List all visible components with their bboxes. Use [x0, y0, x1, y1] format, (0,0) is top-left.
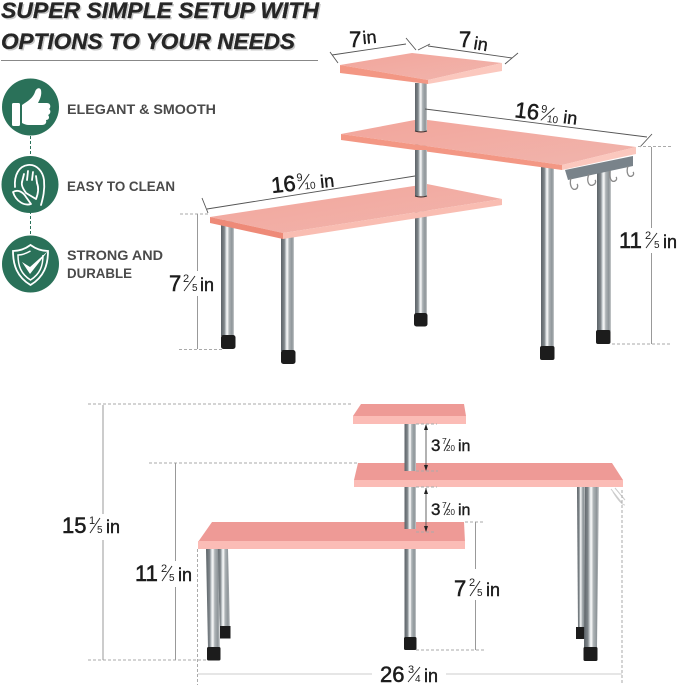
hook detail [611, 488, 625, 505]
title: OPTIONS TO YOUR NEEDS [1, 29, 295, 54]
label: strong and durable: DURABLE [67, 265, 132, 281]
dimension: middle shelf length 16 9/10 in: 9 [540, 103, 548, 116]
dimension: right height 11 2/5 in: 2 [645, 230, 651, 242]
title: OPTIONS TO YOUR NEEDS [2, 30, 297, 56]
dimension: overall width 26 3/4 in [198, 490, 622, 686]
dimension: middle shelf length 16 9/10 in: 16 [513, 97, 541, 125]
front left leg [206, 549, 220, 660]
dimension: top shelf width 7 in left [330, 27, 416, 63]
back left leg [217, 549, 230, 638]
dimension: upper gap 3 7/20 in: in [458, 438, 470, 455]
hook rack [565, 156, 634, 189]
dimension: overall width 26 3/4 in: 3 [408, 664, 414, 676]
title: SUPER SIMPLE SETUP WITH [2, 0, 322, 24]
dimension: left height 7 2/5 in: 5 [192, 283, 198, 294]
right back leg [596, 170, 611, 344]
dimension: bottom shelf height 7 2/5 in: 2 [469, 577, 475, 589]
dimension: bottom shelf length 16 9/10 in: in [319, 171, 335, 192]
dimension: middle height 11 2/5 in: 2 [161, 563, 167, 575]
dimension: overall height 15 1/5 in: 15 [62, 513, 86, 538]
icon: thumbs up [2, 78, 59, 136]
dimension: upper gap 3 7/20 in: 3 [431, 436, 440, 455]
title [1, 0, 322, 56]
top shelf front view [353, 404, 466, 424]
label: elegant and smooth: ELEGANT & SMOOTH [67, 101, 216, 117]
dimension: left height 7 2/5 in: 7 [169, 271, 181, 296]
dimension: middle shelf length 16 9/10 in: in [562, 107, 578, 129]
dimension: left height 7 2/5 in: in [200, 275, 214, 295]
dimension: left height 7 2/5 in [169, 214, 222, 350]
dimension: overall height 15 1/5 in: 1 [89, 515, 95, 527]
label: strong and durable [67, 247, 163, 281]
dimension: lower gap 3 7/20 in: in [458, 502, 470, 519]
dimension: bottom shelf height 7 2/5 in: 7 [454, 576, 466, 601]
dimension: middle shelf length 16 9/10 in [425, 97, 652, 147]
dimension: top shelf depth 7 in right: 7 [459, 27, 471, 52]
dimension: right height 11 2/5 in [612, 146, 677, 344]
left front leg [281, 236, 296, 364]
dimension: upper gap 3 7/20 in [416, 424, 470, 471]
dimension: bottom shelf height 7 2/5 in: in [486, 580, 500, 600]
centre pole [404, 424, 416, 650]
dimension: middle height 11 2/5 in: in [178, 565, 192, 585]
dimension: top shelf width 7 in left: in [362, 27, 377, 48]
label: easy to clean: EASY TO CLEAN [67, 178, 175, 194]
dimension: top shelf depth 7 in right: in [472, 33, 489, 55]
dimension: upper gap 3 7/20 in: 7 [442, 436, 447, 446]
dimension: top shelf width 7 in left: 7 [349, 27, 361, 52]
top shelf [340, 53, 502, 84]
back right leg [576, 487, 585, 639]
dimension: right height 11 2/5 in: 11 [619, 228, 642, 253]
icon: hand wiping [2, 156, 58, 213]
dimension: bottom shelf length 16 9/10 in: 10 [304, 180, 317, 193]
middle shelf front view [354, 440, 623, 487]
middle shelf [341, 84, 636, 170]
central pole [414, 83, 428, 326]
bottom shelf [210, 150, 502, 239]
dimension: upper gap 3 7/20 in: 20 [446, 444, 455, 453]
label: strong and durable: STRONG AND [67, 247, 163, 263]
dimension: middle height 11 2/5 in: 11 [135, 561, 158, 586]
feature list [2, 78, 216, 292]
shelf unit: front view [198, 404, 625, 661]
dimension: middle shelf length 16 9/10 in: 10 [546, 114, 559, 126]
front right leg [584, 487, 599, 661]
dimension: middle height 11 2/5 in [135, 463, 358, 660]
dimension: right height 11 2/5 in: 5 [654, 240, 660, 251]
dimension: overall height 15 1/5 in: 5 [97, 525, 103, 536]
dimension: lower gap 3 7/20 in: 7 [442, 500, 447, 510]
dimension: bottom shelf length 16 9/10 in [202, 167, 415, 213]
dimension: bottom shelf length 16 9/10 in: 9 [296, 172, 303, 184]
dimension: right height 11 2/5 in: in [663, 232, 677, 252]
dimension: bottom shelf height 7 2/5 in [416, 522, 500, 650]
dimension: overall height 15 1/5 in [62, 404, 353, 660]
dimension: top shelf depth 7 in right [418, 27, 518, 64]
dimension: bottom shelf length 16 9/10 in: 16 [270, 171, 297, 198]
dimension: lower gap 3 7/20 in: 3 [431, 500, 440, 519]
dimension: overall width 26 3/4 in: in [424, 666, 438, 686]
icon: shield with check [2, 236, 59, 292]
dimension: overall width 26 3/4 in: 4 [415, 674, 421, 685]
dimension: lower gap 3 7/20 in [416, 487, 470, 532]
left back leg [221, 220, 236, 349]
dimension: left height 7 2/5 in: 2 [183, 273, 189, 285]
right front leg [540, 165, 554, 360]
dimension: lower gap 3 7/20 in: 20 [446, 508, 455, 517]
bottom shelf front view [198, 490, 465, 549]
dimension: bottom shelf height 7 2/5 in: 5 [477, 588, 483, 599]
dimension: middle height 11 2/5 in: 5 [169, 573, 175, 584]
shelf unit: angled view [210, 53, 636, 364]
dimension: overall height 15 1/5 in: in [106, 517, 120, 537]
